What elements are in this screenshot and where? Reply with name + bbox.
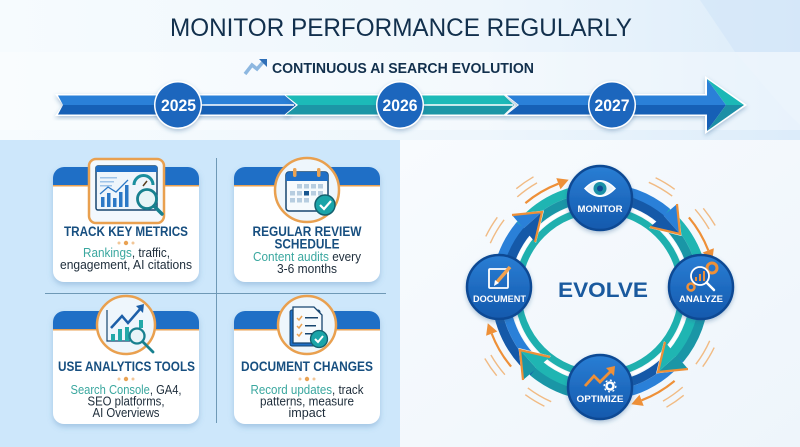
body text	[250, 383, 364, 420]
motion arrow: upper left	[486, 177, 569, 243]
right panel background	[400, 140, 800, 447]
body text	[60, 246, 192, 272]
icon: checklist document	[278, 296, 336, 354]
motion arrow: lower right	[631, 341, 714, 407]
icon: eye	[585, 181, 615, 196]
panel: document changes	[234, 296, 380, 424]
node: optimize: OPTIMIZE	[576, 394, 624, 405]
node: optimize	[568, 355, 632, 419]
body text: patterns, measure	[260, 394, 354, 408]
timeline arrow	[55, 76, 747, 134]
body text	[70, 383, 182, 420]
milestone 2027	[588, 81, 636, 129]
segment: 2026 teal	[283, 94, 517, 116]
motion arrow: upper right	[649, 178, 715, 261]
icon: calendar with check	[275, 158, 339, 222]
motion arrow: lower left	[485, 323, 551, 406]
separator dots	[118, 241, 134, 245]
heading: SCHEDULE	[274, 236, 340, 252]
node: analyze: ANALYZE	[679, 294, 723, 305]
icon: dashboard with magnifier	[89, 159, 164, 223]
milestone 2025: 2025	[161, 97, 196, 115]
node: monitor: MONITOR	[578, 204, 623, 215]
milestone 2025	[154, 81, 202, 129]
arrow: analyze to optimize	[600, 292, 704, 396]
icon: trend arrow and gear	[585, 366, 616, 392]
arrow: document to monitor	[496, 188, 600, 292]
node: monitor	[568, 166, 632, 230]
body text: Content audits every	[253, 250, 362, 264]
cycle diagram	[467, 166, 733, 419]
heading: REGULAR REVIEW	[252, 224, 362, 239]
body text: Record updates, track	[250, 383, 364, 397]
inner teal ring	[512, 204, 688, 380]
milestone 2026: 2026	[382, 97, 418, 115]
icon: document with pencil	[489, 267, 510, 288]
arrow: optimize to document	[496, 292, 600, 396]
subtitle text: CONTINUOUS AI SEARCH EVOLUTION	[272, 61, 534, 77]
body text: Search Console, GA4,	[70, 383, 182, 397]
body text: impact	[288, 406, 326, 420]
node: document: DOCUMENT	[473, 294, 526, 305]
panel: use analytics tools	[53, 296, 199, 424]
node: analyze	[669, 255, 733, 319]
body text: SEO platforms,	[88, 394, 164, 408]
body text: 3-6 months	[277, 262, 337, 276]
icon: chart with magnifier	[97, 296, 155, 354]
heading: TRACK KEY METRICS	[64, 224, 188, 239]
segment: 2027 blue with arrow head	[504, 76, 747, 134]
separator dots	[298, 377, 316, 381]
separator dots	[118, 377, 134, 381]
icon: magnifier and gears	[688, 263, 717, 290]
white guide lines	[200, 104, 513, 106]
milestone 2027: 2027	[594, 97, 630, 115]
body text	[253, 250, 362, 276]
body text: Rankings, traffic,	[83, 246, 170, 260]
panel: regular review schedule	[234, 158, 380, 282]
center label: EVOLVE	[558, 279, 648, 302]
icon: rising arrow	[245, 59, 267, 74]
body text: AI Overviews	[92, 406, 160, 420]
grid dividers	[45, 158, 386, 423]
heading: USE ANALYTICS TOOLS	[58, 359, 195, 374]
segment: 2025 blue	[55, 94, 298, 116]
node: document	[467, 255, 531, 319]
header background	[0, 0, 800, 140]
milestone 2026	[376, 81, 424, 129]
panel: track key metrics	[53, 159, 199, 282]
left panel background	[0, 140, 400, 447]
heading	[252, 224, 362, 252]
subtitle with trend icon	[245, 59, 534, 77]
arrow: monitor to analyze	[600, 188, 704, 292]
title: MONITOR PERFORMANCE REGULARLY	[170, 14, 632, 42]
heading: DOCUMENT CHANGES	[241, 359, 373, 374]
body text: engagement, AI citations	[60, 258, 192, 272]
